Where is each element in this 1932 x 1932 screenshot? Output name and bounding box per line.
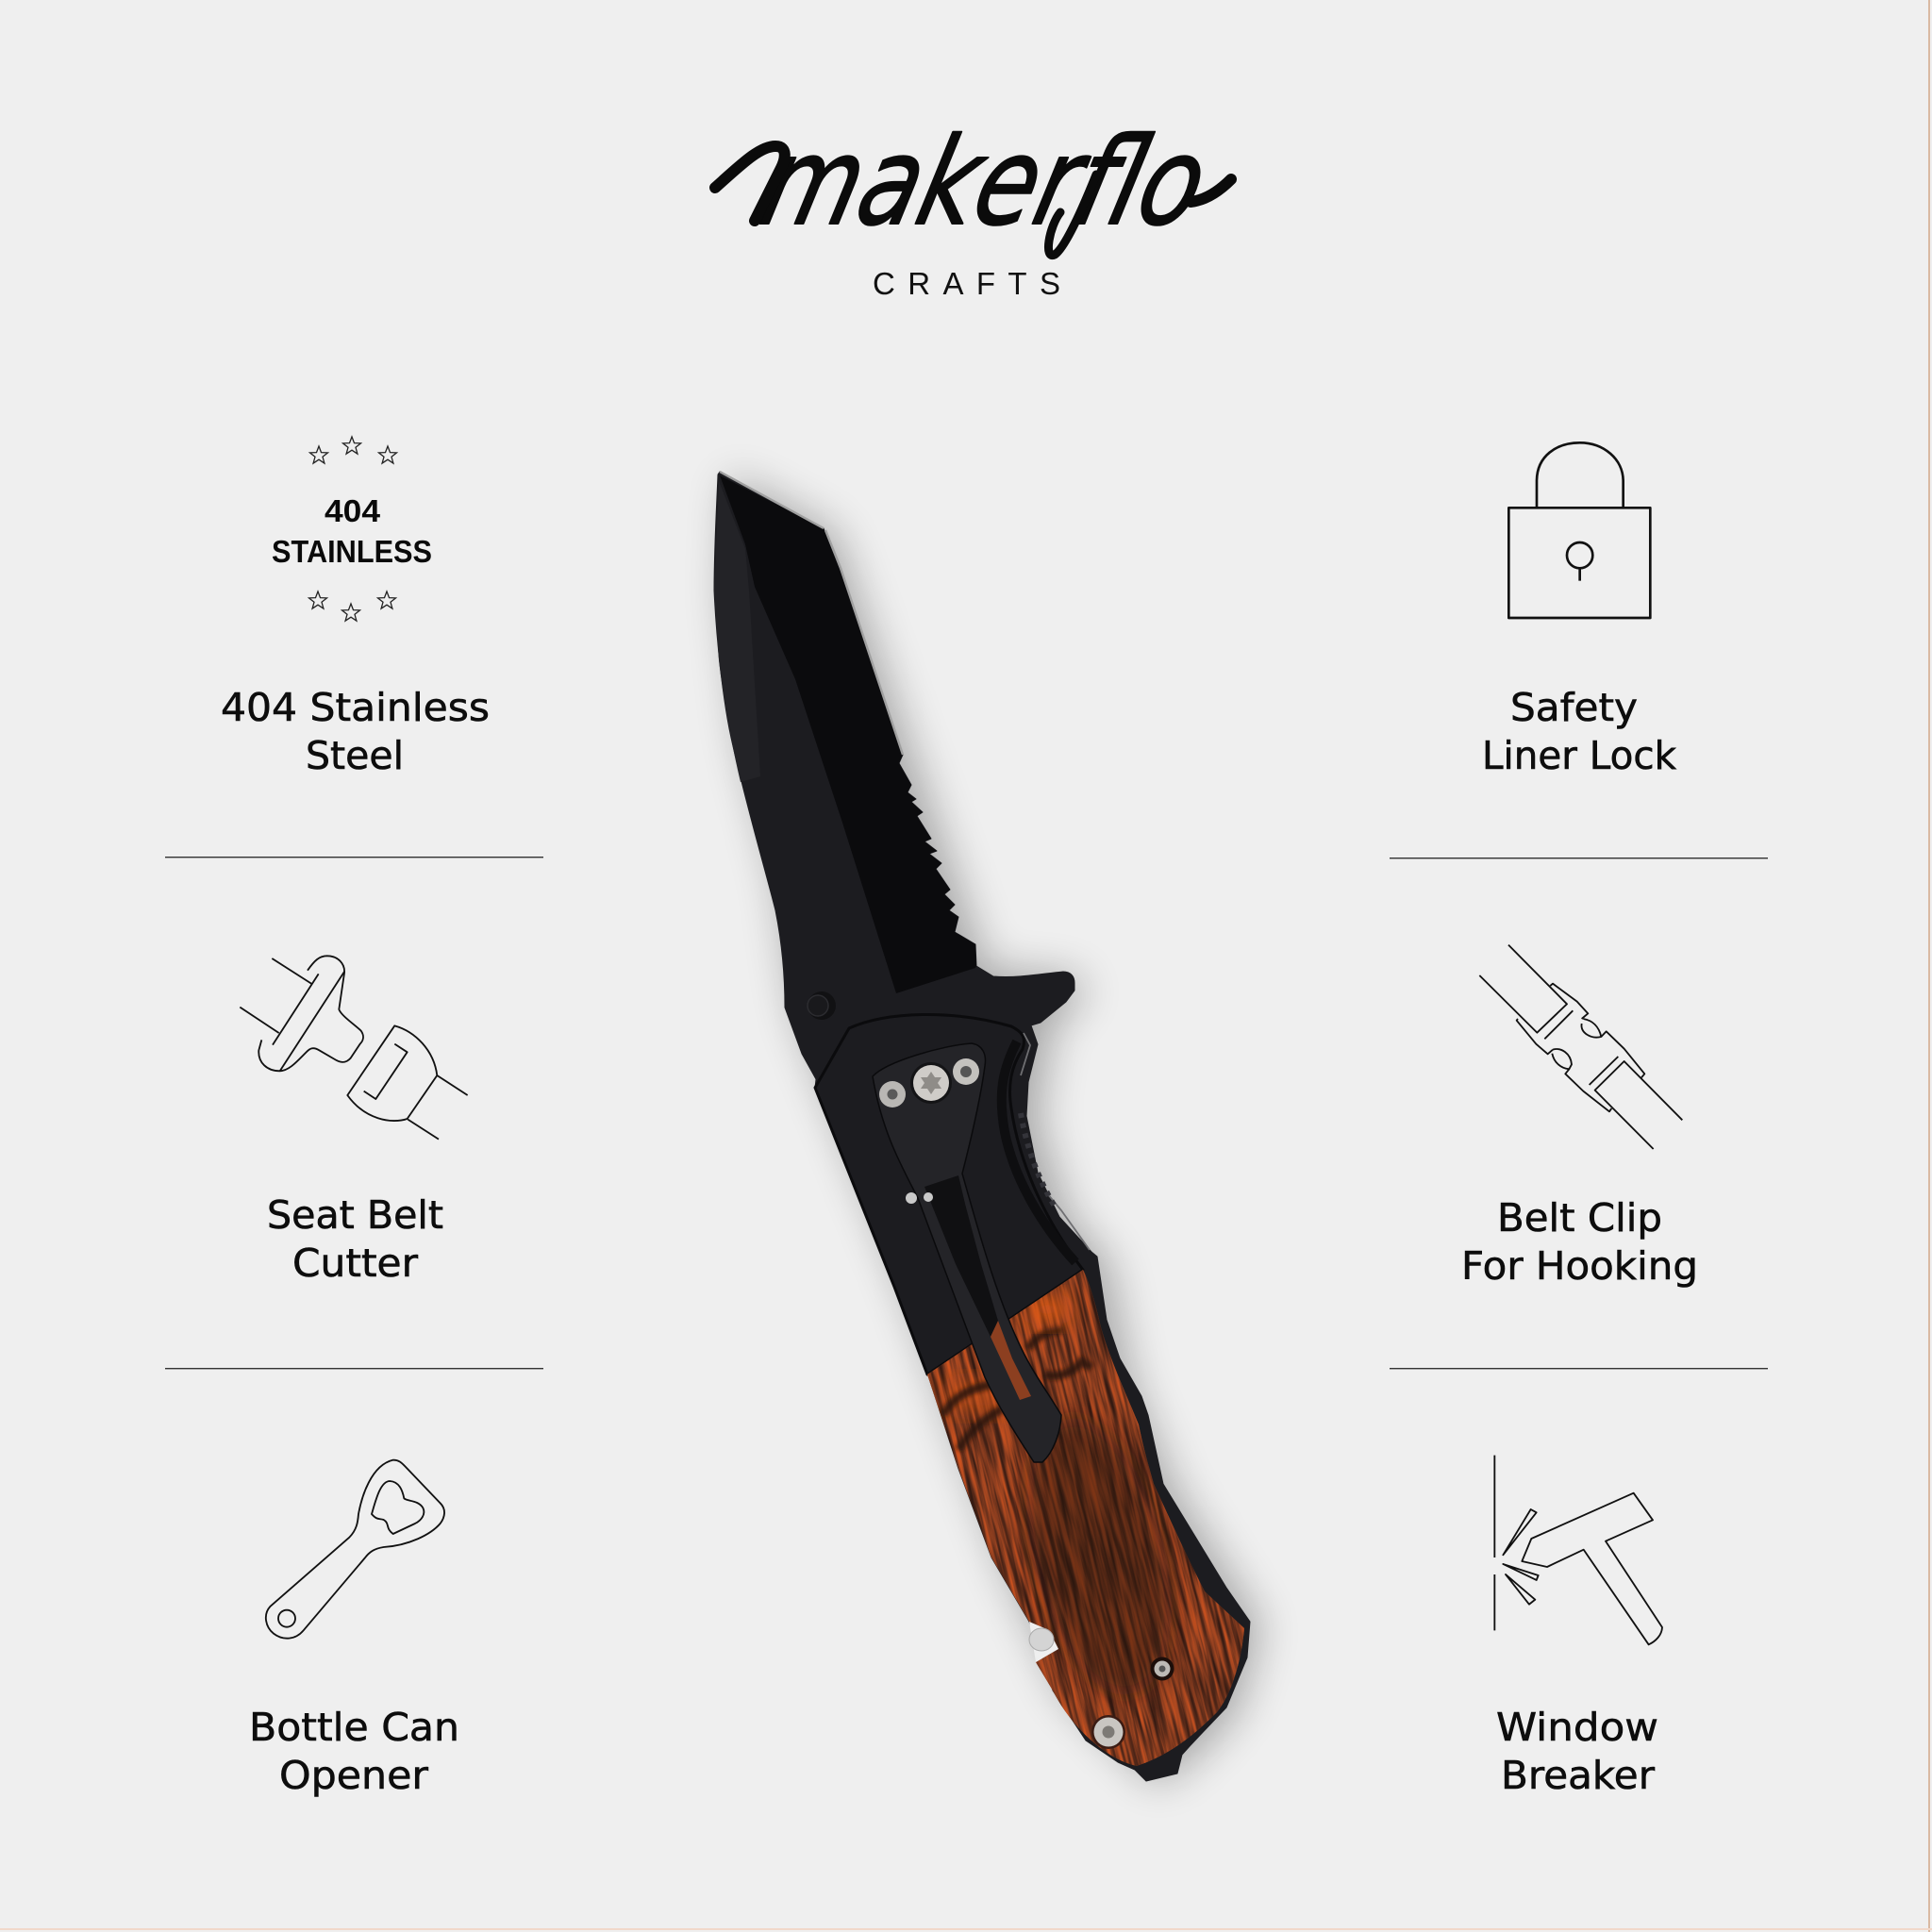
- belt clip: [873, 1043, 1061, 1462]
- logo subtitle: CRAFTS: [873, 266, 1060, 301]
- feature: bottle can opener: [249, 1460, 459, 1798]
- wood notch window: [1029, 1622, 1058, 1662]
- wood dark cloud: [1014, 1407, 1183, 1706]
- blade sharpened silver edges: [720, 472, 903, 755]
- icon: bottle opener: [266, 1460, 444, 1639]
- knife drop shadow: [725, 475, 1261, 1785]
- divider right bottom: [1390, 1368, 1768, 1369]
- label: window breaker: [1496, 1705, 1658, 1798]
- divider left bottom: [165, 1368, 543, 1369]
- wood screw lower: [1091, 1715, 1125, 1749]
- blade thumb pin: [808, 991, 836, 1020]
- icon: 404 stainless badge: 404: [325, 493, 381, 528]
- knife silhouette: blade and frame: [714, 472, 1250, 1781]
- central product image: folding knife: [702, 465, 1279, 1798]
- icon: 404 stainless badge: STAINLESS: [272, 534, 432, 569]
- clip rivet glints: [906, 1192, 933, 1204]
- blade dark bevel facet: [720, 475, 976, 993]
- icon: seat belt buckle: [240, 956, 468, 1140]
- feature: seat belt cutter: [240, 956, 468, 1286]
- label: bottle can opener: Opener: [279, 1753, 428, 1798]
- label: safety liner lock: [1482, 685, 1676, 778]
- feature: safety liner lock: [1482, 442, 1676, 778]
- label: belt clip for hooking: For Hooking: [1461, 1243, 1698, 1289]
- label: bottle can opener: Bottle Can: [249, 1705, 459, 1750]
- label: window breaker: Breaker: [1501, 1753, 1655, 1798]
- feature: 404 stainless steel: [221, 437, 490, 778]
- icon: 404 stainless badge: [272, 437, 432, 621]
- screw left: [879, 1081, 906, 1108]
- screw center: [910, 1062, 952, 1104]
- clip slot showing wood: [991, 1321, 1031, 1400]
- label: seat belt cutter: Seat Belt: [267, 1192, 443, 1238]
- handle bolster plate: [815, 1014, 1083, 1374]
- label: bottle can opener: [249, 1705, 459, 1798]
- label: 404 stainless steel: [221, 685, 490, 778]
- logo script wordmark: makerflo: [749, 111, 1221, 253]
- liner highlights: [1021, 1033, 1090, 1250]
- label: 404 stainless steel: Steel: [306, 733, 404, 778]
- logo: makerflo crafts: [715, 111, 1231, 301]
- blade tip strip: [714, 481, 760, 782]
- label: belt clip for hooking: Belt Clip: [1497, 1195, 1662, 1241]
- wood screw upper: [1151, 1657, 1174, 1681]
- label: safety liner lock: Safety: [1510, 685, 1638, 730]
- divider left top: [165, 857, 543, 858]
- handle recess shadow: [1002, 1041, 1075, 1262]
- jimping teeth: [1021, 1113, 1057, 1209]
- label: seat belt cutter: Cutter: [292, 1241, 418, 1286]
- label: window breaker: Window: [1496, 1705, 1658, 1750]
- feature: window breaker: [1494, 1456, 1662, 1798]
- icon: hammer breaking glass: [1494, 1456, 1662, 1644]
- clip slot: [924, 1175, 998, 1337]
- label: belt clip for hooking: [1461, 1195, 1698, 1289]
- icon: padlock: [1508, 442, 1650, 618]
- wood handle scale: [927, 1270, 1244, 1766]
- wood orange top: [938, 1379, 1024, 1413]
- label: 404 stainless steel: 404 Stainless: [221, 685, 490, 730]
- label: safety liner lock: Liner Lock: [1482, 733, 1676, 778]
- window breaker cylinder: [1029, 1628, 1054, 1651]
- screw right: [953, 1058, 979, 1085]
- wood growth rings: [943, 1330, 1091, 1450]
- icon: belt clip buckle: [1479, 945, 1682, 1149]
- feature: belt clip for hooking: [1461, 945, 1698, 1289]
- label: seat belt cutter: [267, 1192, 443, 1286]
